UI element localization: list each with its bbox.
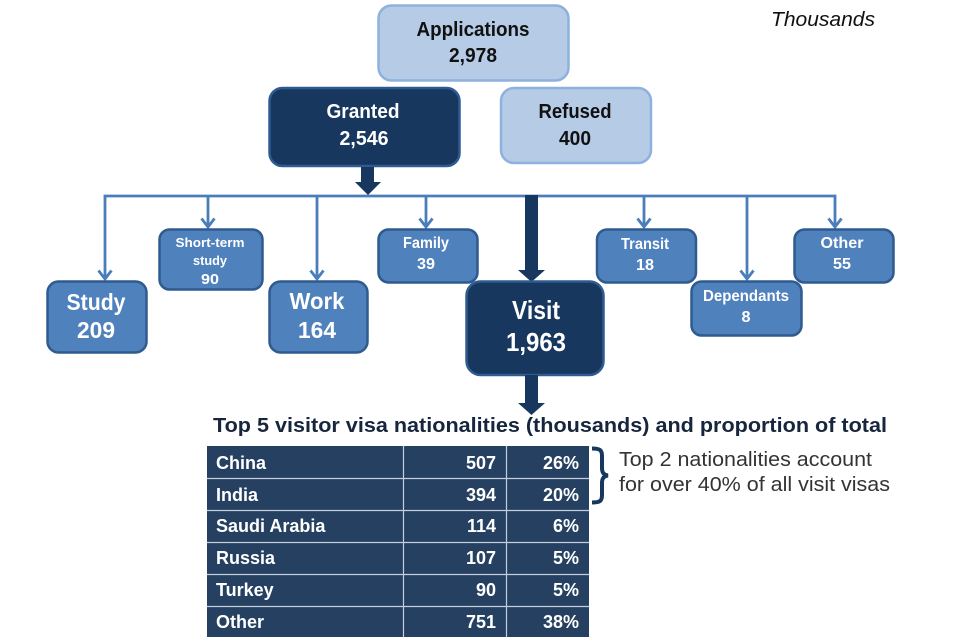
row: Other: Other [216, 612, 264, 632]
connector lines [98, 196, 842, 279]
box: short-term study: 90 [201, 271, 219, 288]
box: family: Family [403, 235, 449, 252]
row: China [216, 453, 579, 473]
box: refused: 400 [559, 128, 591, 150]
arrow: categories to visit [518, 195, 545, 282]
box: visit [466, 282, 604, 375]
row: China: 26% [543, 453, 579, 473]
row: Turkey: 5% [553, 580, 579, 600]
box: short-term study: study [193, 253, 228, 268]
box: work: 164 [298, 317, 336, 343]
box: applications [378, 6, 568, 80]
box: granted [270, 88, 460, 166]
box: visit: Visit [512, 295, 560, 325]
row: Saudi Arabia: 6% [553, 516, 579, 536]
box: study [48, 282, 146, 352]
callout text [619, 449, 890, 496]
row: Other [216, 612, 579, 632]
box: applications: 2,978 [449, 45, 497, 67]
box: other: 55 [833, 256, 851, 273]
row: India: 20% [543, 485, 579, 505]
arrow: visit to table [518, 375, 545, 415]
box: granted: 2,546 [340, 128, 388, 150]
box: short-term study [160, 230, 262, 290]
box: transit: 18 [636, 257, 654, 274]
row: Saudi Arabia: Saudi Arabia [216, 516, 326, 536]
arrow: granted to categories [355, 167, 381, 195]
box: refused [501, 88, 651, 163]
box: transit: Transit [621, 236, 669, 253]
row: Saudi Arabia: 114 [467, 516, 496, 536]
row: Turkey: 90 [476, 580, 496, 600]
box: transit [597, 230, 696, 282]
row: Saudi Arabia [216, 516, 579, 536]
row: India: India [216, 485, 259, 505]
box: refused: Refused [538, 101, 612, 123]
box: dependants: 8 [742, 309, 751, 326]
table heading: Top 5 visitor visa nationalities (thousands) and proportion of total [213, 415, 887, 437]
row: Other: 751 [466, 612, 496, 632]
box: work: Work [290, 288, 345, 314]
box: granted: Granted [326, 101, 400, 123]
box: family: 39 [417, 256, 435, 273]
box: other [794, 230, 894, 282]
callout text: Top 2 nationalities account [619, 449, 872, 471]
box: study: 209 [77, 317, 115, 343]
row: Turkey [216, 580, 579, 600]
row: Other: 38% [543, 612, 579, 632]
row: India: 394 [466, 485, 496, 505]
box: applications: Applications [416, 19, 530, 41]
box: short-term study: Short-term [176, 235, 244, 250]
row: China: China [216, 453, 267, 473]
brace [592, 448, 608, 502]
box: family [378, 230, 478, 282]
row: Turkey: Turkey [216, 580, 274, 600]
box: study: Study [66, 289, 126, 315]
row: Russia: 107 [466, 548, 496, 568]
box: dependants: Dependants [703, 288, 789, 305]
thousands note: Thousands [771, 9, 875, 31]
row: Russia: Russia [216, 548, 276, 568]
row: China: 507 [466, 453, 496, 473]
row: India [216, 485, 579, 505]
table: top nationalities [207, 446, 589, 637]
box: dependants [692, 282, 802, 336]
box: work [270, 282, 368, 352]
callout text: for over 40% of all visit visas [619, 474, 890, 496]
row: Russia [216, 548, 579, 568]
box: other: Other [820, 235, 864, 252]
row: Russia: 5% [553, 548, 579, 568]
box: visit: 1,963 [506, 327, 566, 357]
